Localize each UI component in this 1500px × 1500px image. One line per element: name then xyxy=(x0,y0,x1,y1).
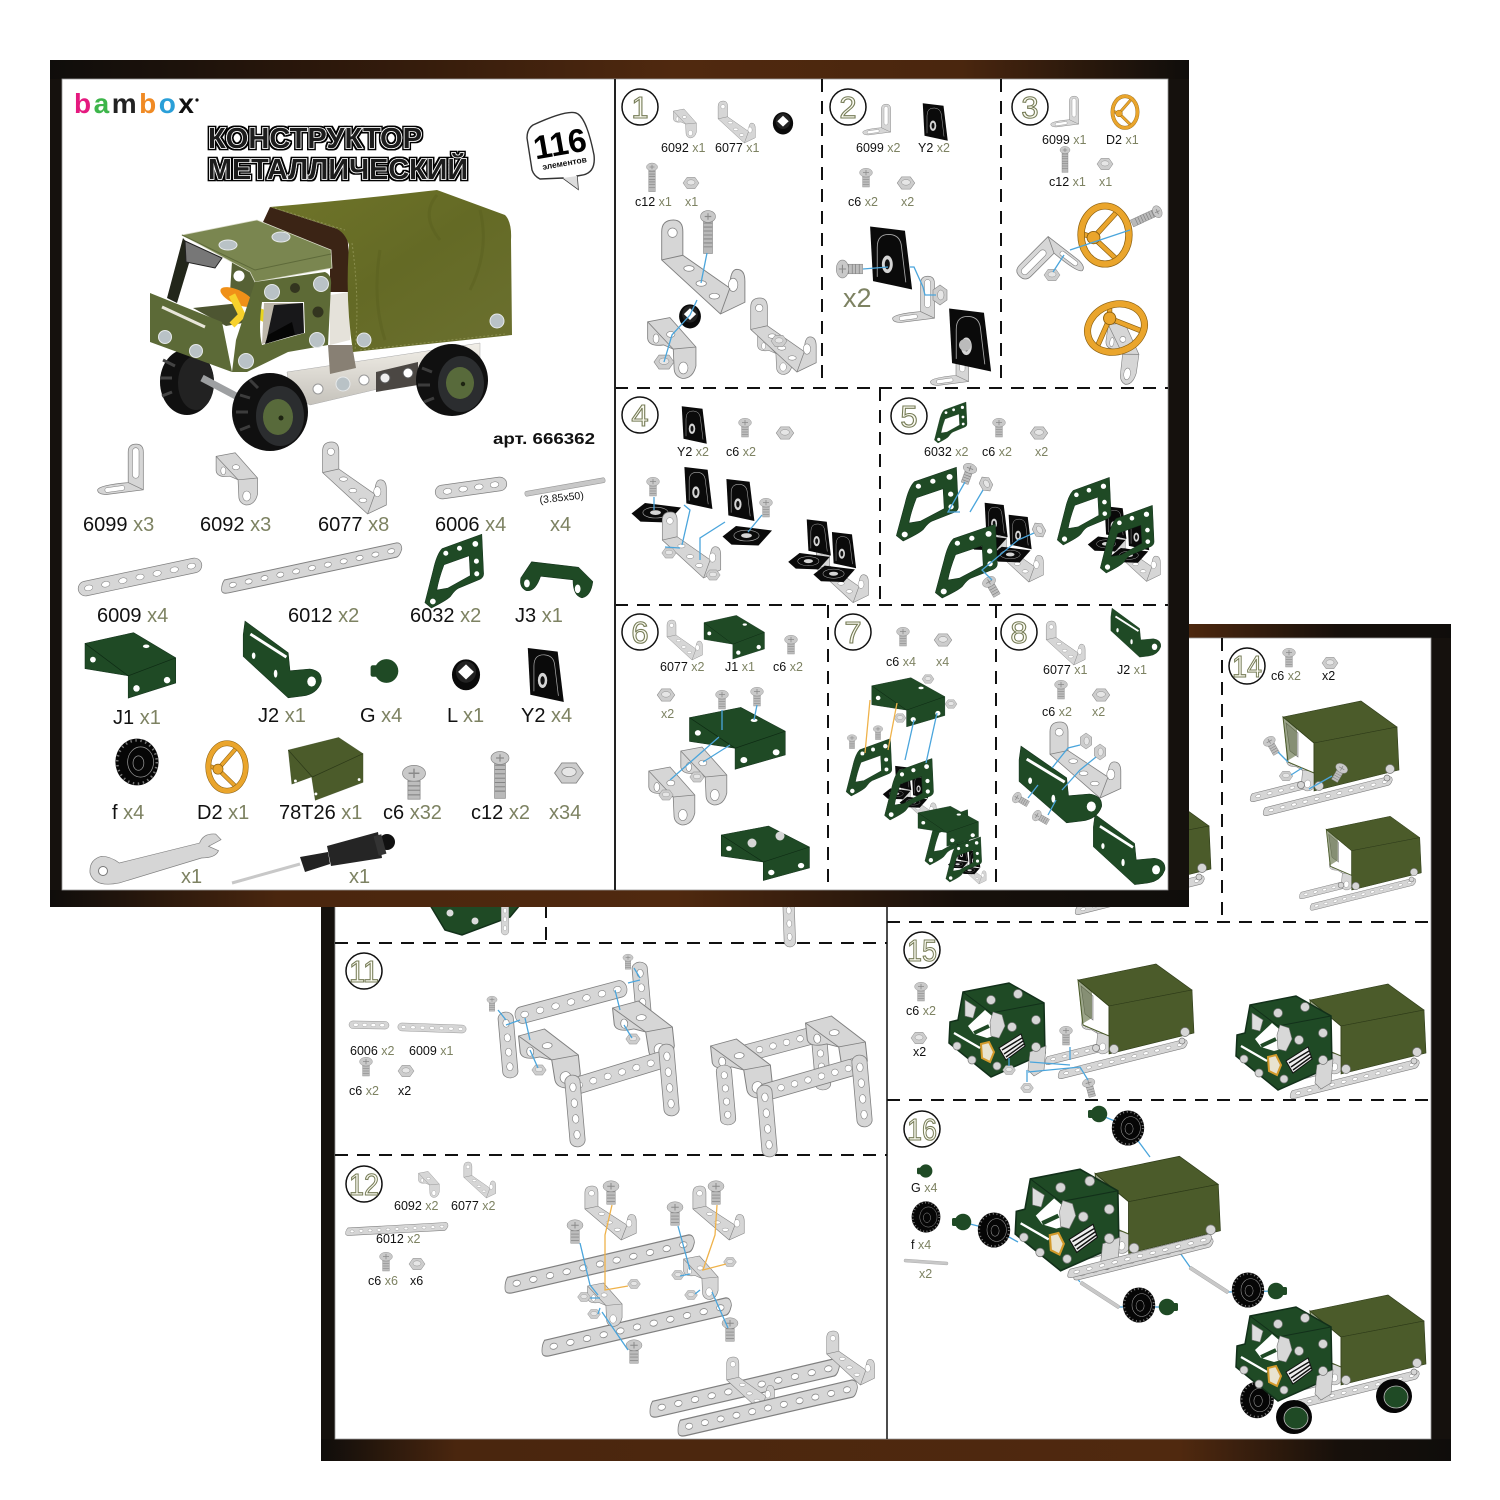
tool: wrench: x1 xyxy=(181,866,202,888)
parts list: 6092 x2 xyxy=(394,1199,439,1213)
parts list: x2 xyxy=(1092,705,1105,719)
step number 12: 12 xyxy=(349,1167,379,1202)
parts list: x2 xyxy=(661,707,674,721)
panel: step 11 xyxy=(346,953,873,1158)
parts list: 6032 x2 xyxy=(924,445,969,459)
parts list xyxy=(848,103,950,209)
step number 1 xyxy=(622,89,658,125)
parts list: 6092 x1 xyxy=(661,141,706,155)
sheet frame xyxy=(321,624,1451,1461)
row 4: 78T26 x1 xyxy=(279,802,362,824)
tarp xyxy=(270,190,512,352)
parts list: 6006 x2 xyxy=(350,1044,395,1058)
parts list: x1 xyxy=(1099,175,1112,189)
step number 6: 6 xyxy=(631,615,649,650)
parts list: c6 x2 xyxy=(1042,705,1072,719)
assembly finished xyxy=(930,308,991,385)
assembly: frame exploded xyxy=(487,954,680,1148)
step 13 remnant xyxy=(1061,800,1211,915)
row 1: x4 xyxy=(550,514,571,536)
step number 16: 16 xyxy=(907,1112,937,1147)
parts list xyxy=(904,1164,948,1281)
row 2 xyxy=(77,534,593,627)
parts list: 6099 x1 xyxy=(1042,133,1087,147)
parts list: c6 x2 xyxy=(773,660,803,674)
assembly finished xyxy=(1057,477,1160,581)
parts list xyxy=(677,406,794,459)
parts list xyxy=(924,402,1048,459)
step number 2: 2 xyxy=(839,90,857,125)
row 3: J2 x1 xyxy=(258,705,306,727)
assembly exploded xyxy=(1014,204,1164,305)
panel: step 8 xyxy=(1001,608,1165,885)
parts list: c6 x2 xyxy=(349,1084,379,1098)
parts list: J1 x1 xyxy=(725,660,755,674)
assembly exploded xyxy=(648,211,745,378)
chassis strip xyxy=(287,292,480,405)
assembly exploded xyxy=(836,226,947,322)
assembly finished xyxy=(918,806,986,884)
rear-left wheel xyxy=(160,349,214,415)
panel: step 2 xyxy=(830,89,991,385)
parts list: x1 xyxy=(685,195,698,209)
parts list xyxy=(906,982,936,1059)
assembly: cargo box exploded xyxy=(1249,701,1399,816)
panel: step 15 xyxy=(904,932,1426,1099)
parts list: f x4 xyxy=(911,1238,931,1252)
badge: 116 elements: элементов xyxy=(541,154,588,172)
parts list: c6 x4 xyxy=(886,655,916,669)
step number 5: 5 xyxy=(900,399,918,434)
parts list: 6077 x1 xyxy=(1043,663,1088,677)
row 2: 6032 x2 xyxy=(410,605,481,627)
row 1 xyxy=(83,442,606,536)
step number 8 xyxy=(1001,614,1037,650)
tool: screwdriver: x1 xyxy=(349,866,370,888)
parts list: 6077 x2 xyxy=(660,660,705,674)
front wheel xyxy=(232,373,308,451)
row 1: 6077 x8 xyxy=(318,514,389,536)
parts list: x6 xyxy=(410,1274,423,1288)
parts list: Y2 x2 xyxy=(677,445,709,459)
row 3: G x4 xyxy=(360,705,402,727)
step number 5 xyxy=(891,398,927,434)
assembly: frame finished xyxy=(710,1013,873,1158)
step number 15: 15 xyxy=(907,933,937,968)
row 2: J3 x1 xyxy=(515,605,563,627)
parts list: x2 xyxy=(1035,445,1048,459)
parts list: c6 x6 xyxy=(368,1274,398,1288)
row 3 xyxy=(85,621,572,729)
parts list: D2 x1 xyxy=(1106,133,1139,147)
panel: instruction sheet 2 (back) xyxy=(321,624,1451,1461)
parts list: 6009 x1 xyxy=(409,1044,454,1058)
parts list: 6012 x2 xyxy=(376,1232,421,1246)
steering wheel and dashboard xyxy=(218,283,276,325)
row 1: 6006 x4 xyxy=(435,514,506,536)
parts list: G x4 xyxy=(911,1181,937,1195)
step 10 remnant xyxy=(430,887,796,947)
assembly exploded xyxy=(896,461,1048,599)
bumper plate xyxy=(150,293,232,372)
panel: step 3 xyxy=(1012,89,1164,386)
step number 7 xyxy=(835,614,871,650)
step number 2 xyxy=(830,89,866,125)
step number 6 xyxy=(622,614,658,650)
assembly: rails finished xyxy=(647,1331,874,1437)
row 3: Y2 x4 xyxy=(521,705,572,727)
panel: step 16 xyxy=(904,1106,1426,1434)
step number 4: 4 xyxy=(631,398,649,433)
panel: step 1 xyxy=(622,89,816,378)
parts list xyxy=(886,627,952,669)
assembly finished xyxy=(788,519,868,603)
assembly exploded xyxy=(1010,722,1121,827)
step number 3: 3 xyxy=(1021,90,1039,125)
step number 1: 1 xyxy=(631,90,649,125)
assembly: wheels exploded xyxy=(952,1106,1287,1323)
parts list xyxy=(1271,648,1338,683)
assembly: rails exploded xyxy=(502,1181,744,1363)
assembly finished xyxy=(721,826,809,881)
panel: step 4 xyxy=(622,397,868,603)
step number 14: 14 xyxy=(1232,649,1262,684)
badge: 116 elements xyxy=(527,112,594,189)
parts list xyxy=(1042,96,1139,189)
row 4: f x4 xyxy=(112,802,144,824)
assembly finished xyxy=(751,298,816,374)
parts list: x2 xyxy=(913,1045,926,1059)
parts list xyxy=(349,1021,466,1098)
parts list: 6077 x2 xyxy=(451,1199,496,1213)
assembly: cargo box finished xyxy=(1298,816,1421,911)
step number 7: 7 xyxy=(844,615,862,650)
assembly finished xyxy=(1081,296,1151,386)
cab side plate xyxy=(232,272,331,372)
assembly exploded xyxy=(632,467,772,580)
title: МЕТАЛЛИЧЕСКИЙ xyxy=(208,152,468,186)
parts list: x2 xyxy=(398,1084,411,1098)
panel: step 5 xyxy=(891,398,1160,599)
parts list: c6 x2 xyxy=(982,445,1012,459)
parts list: x2 xyxy=(901,195,914,209)
assembly exploded: x2 xyxy=(843,283,872,313)
row 1: 6099 x3 xyxy=(83,514,154,536)
row 3: L x1 xyxy=(447,705,484,727)
row 2: 6009 x4 xyxy=(97,605,168,627)
rear wheel xyxy=(416,344,488,416)
assembly: cab and cargo exploded xyxy=(949,964,1194,1098)
bolts xyxy=(158,232,504,391)
front axle xyxy=(202,378,236,396)
row 1: (3.85x50) xyxy=(539,490,584,506)
panel: step 6 xyxy=(622,614,809,881)
sheet frame xyxy=(50,60,1189,907)
step number 3 xyxy=(1012,89,1048,125)
tool: wrench xyxy=(90,834,221,888)
row 4 xyxy=(112,737,583,824)
step number 8: 8 xyxy=(1010,615,1028,650)
row 4: c12 x2 xyxy=(471,802,530,824)
panel: instruction sheet 1 (front) xyxy=(50,60,1189,907)
parts list: c12 x1 xyxy=(1049,175,1086,189)
tool: screwdriver xyxy=(232,832,395,888)
row 3: J1 x1 xyxy=(113,707,161,729)
assembly: cab and cargo joined xyxy=(1236,984,1426,1099)
step number 4 xyxy=(622,397,658,433)
cab frame and window xyxy=(167,238,258,326)
cab roof xyxy=(182,220,332,282)
badge: 116 elements: 116 xyxy=(530,121,589,166)
parts list: c6 x2 xyxy=(1271,669,1301,683)
row 4: D2 x1 xyxy=(197,802,249,824)
panel: step 7 xyxy=(835,614,986,884)
parts list xyxy=(635,101,793,209)
assembly finished xyxy=(1093,814,1165,885)
parts list: Y2 x2 xyxy=(918,141,950,155)
title xyxy=(208,123,468,186)
parts list: c12 x1 xyxy=(635,195,672,209)
step number 11: 11 xyxy=(349,954,379,989)
assembly: finished truck xyxy=(1236,1295,1426,1434)
article number: арт. 666362 xyxy=(493,431,595,448)
parts list xyxy=(345,1162,496,1288)
row 4: c6 x32 xyxy=(383,802,442,824)
parts list: x2 xyxy=(919,1267,932,1281)
parts list: x4 xyxy=(936,655,949,669)
parts list: x2 xyxy=(1322,669,1335,683)
parts list xyxy=(657,615,803,721)
logo: bambox xyxy=(74,88,196,119)
parts list: c6 x2 xyxy=(848,195,878,209)
parts list: c6 x2 xyxy=(906,1004,936,1018)
panel: step 12 xyxy=(345,1162,874,1437)
row 2: 6012 x2 xyxy=(288,605,359,627)
row 4: x34 xyxy=(549,802,581,824)
assembly exploded xyxy=(846,675,957,821)
photo: assembled toy truck xyxy=(150,190,512,451)
parts list: c6 x2 xyxy=(726,445,756,459)
parts list: 6099 x2 xyxy=(856,141,901,155)
parts list: 6077 x1 xyxy=(715,141,760,155)
panel: step 14 xyxy=(1229,648,1421,911)
row 1: 6092 x3 xyxy=(200,514,271,536)
parts list: J2 x1 xyxy=(1117,663,1147,677)
title: КОНСТРУКТОР xyxy=(208,123,422,155)
parts inventory xyxy=(77,442,606,888)
assembly exploded xyxy=(649,687,785,825)
parts list xyxy=(1042,608,1161,719)
